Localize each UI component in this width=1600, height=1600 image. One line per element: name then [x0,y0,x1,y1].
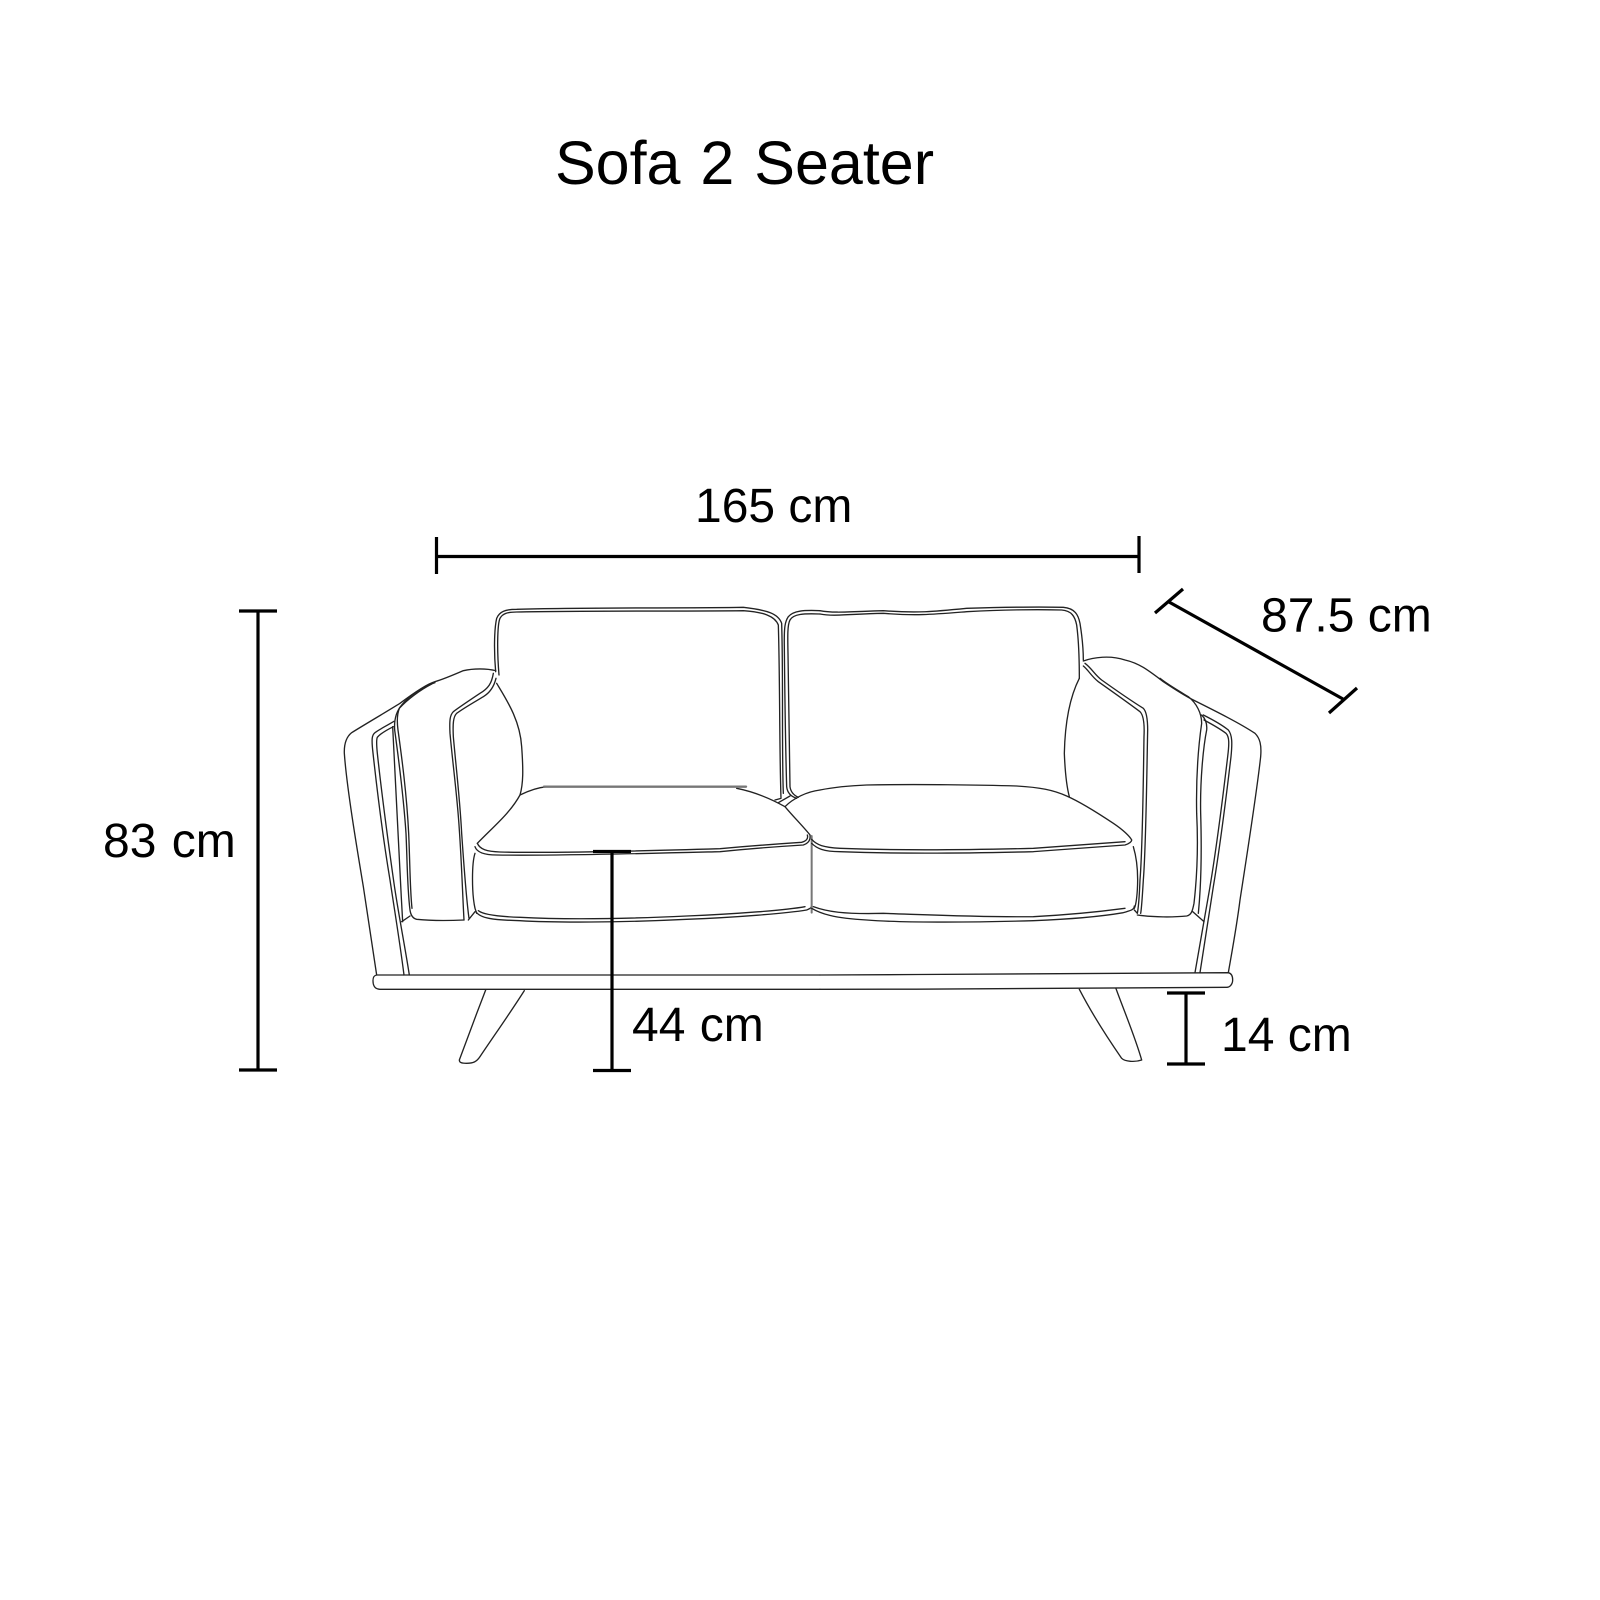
left back cushion [495,607,820,800]
title: Sofa 2 Seater [555,129,934,197]
right seat cushion [812,785,1138,922]
right arm [1064,657,1261,973]
leg height dimension line [1167,993,1205,1064]
left leg [459,990,524,1063]
seat height dimension line [593,852,631,1070]
depth dimension line [1155,589,1357,713]
width dimension line [436,536,1139,574]
sofa left half [344,607,820,1063]
sofa base left [373,975,820,989]
sofa base right [820,973,1233,989]
leg height label: 14 cm [1221,1009,1352,1062]
seat height label: 44 cm [632,999,764,1052]
right leg [1079,989,1142,1061]
left arm [344,669,523,975]
right back cushion [820,607,1083,678]
width label: 165 cm [695,480,852,533]
overall height label: 83 cm [103,815,236,868]
sofa line drawing [344,607,1261,1063]
sofa right half [812,607,1261,1061]
overall height dimension line [239,611,277,1070]
left seat cushion [472,787,820,922]
depth label: 87.5 cm [1261,590,1432,642]
